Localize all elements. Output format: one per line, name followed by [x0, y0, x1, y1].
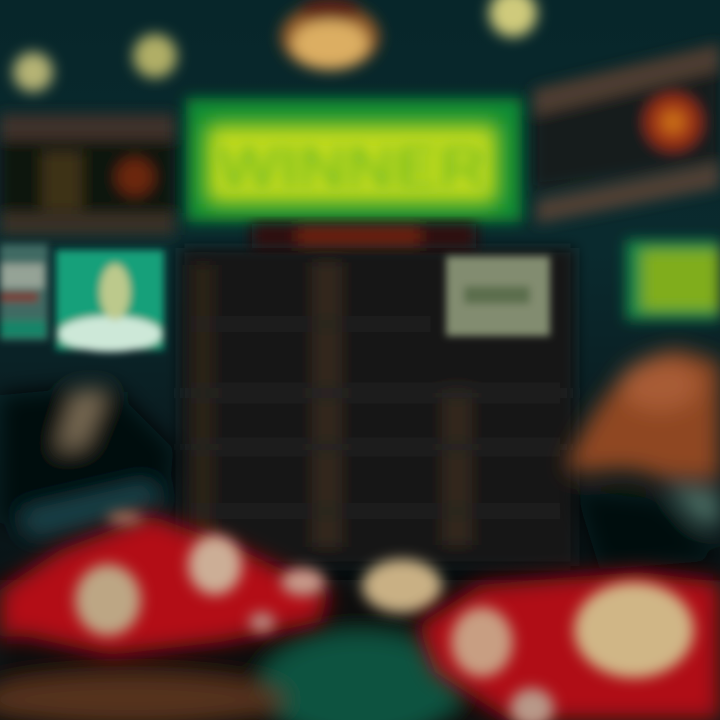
sign text: WINNER: [217, 134, 487, 201]
dark left object: [0, 385, 175, 538]
grey-green board panel: [446, 256, 550, 336]
board rows: [185, 320, 565, 515]
ceiling lights: [13, 0, 537, 92]
left teal poster: [56, 250, 164, 352]
bottom table: [0, 580, 720, 720]
winner sign: [186, 98, 522, 222]
center board: [180, 248, 575, 566]
board columns: [192, 262, 472, 547]
left shelves: [0, 114, 175, 235]
hanging lamp: [280, 0, 380, 71]
far left poster: [0, 244, 48, 340]
chip spots: [75, 512, 325, 636]
chip spots: [451, 582, 694, 720]
center chip: [362, 559, 442, 613]
hand: [565, 350, 720, 570]
red chips left: [0, 512, 330, 655]
right shelves: [533, 42, 720, 224]
right green poster: [626, 240, 720, 320]
red chips right: [418, 572, 720, 720]
red banner: [252, 224, 476, 248]
